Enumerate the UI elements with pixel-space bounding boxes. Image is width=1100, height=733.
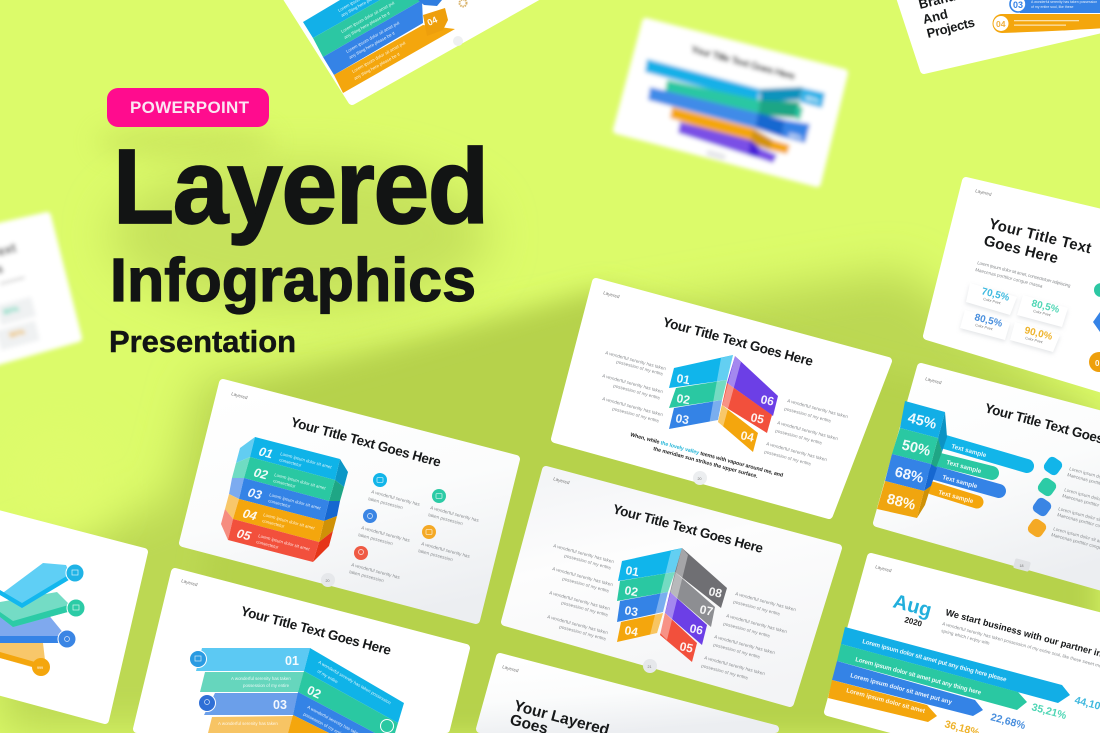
card: right stats slide: Goes Here — [982, 232, 1060, 267]
card: top right brand slide — [899, 0, 1100, 70]
title: Your Title Text Goes Here — [611, 501, 765, 556]
chart: fold 8 — [617, 548, 727, 662]
chart: fold 6: 01 — [675, 371, 691, 387]
icon list: A wonderful serenity has — [361, 525, 411, 543]
pills: Text sample — [941, 474, 978, 490]
card: bottom left layers slide — [0, 513, 144, 720]
chart: fold 6 — [669, 355, 778, 452]
card: layered steps slide: Layered — [181, 578, 199, 587]
card: 5 stacked layers slide — [183, 383, 516, 620]
card: top layered slide: any thing here please be it — [353, 51, 401, 81]
right captions: possession of my entire — [701, 663, 749, 681]
icon list: taken possession — [349, 569, 385, 583]
page number: 20 — [698, 477, 702, 481]
chart: fold 8: 08 — [707, 584, 724, 601]
chart: fold 8: 07 — [698, 602, 715, 619]
left captions: A wonderful serenity has taken — [553, 543, 615, 564]
card: right stats slide: Maecenas porttitor congue massa — [975, 267, 1044, 289]
right captions — [701, 591, 797, 681]
title: Your Title Text Goes Here — [239, 603, 393, 658]
card: right stats slide: Lorem ipsum dolor sit amet, consectetuer adipiscing — [977, 260, 1072, 288]
right captions: possession of my entire — [713, 642, 761, 660]
right captions — [764, 398, 849, 467]
card: right stats slide: 0 — [1095, 359, 1100, 368]
card: top layered slide — [285, 0, 540, 101]
stat: 90,0% — [1010, 322, 1060, 354]
band 03: 03 — [1013, 0, 1023, 10]
arrows chart — [828, 627, 1100, 733]
pills — [932, 442, 1027, 505]
card: 01 to 08 fold slide: Layered — [553, 476, 571, 485]
chart: steps: A wonderful serenity has taken possession — [318, 660, 392, 706]
card: 01 to 06 fold slide — [555, 282, 888, 515]
icon list: A wonderful serenity has — [430, 505, 480, 523]
card: right stats slide: Your Title Text — [987, 215, 1093, 257]
chart: stacked cube: Lorem ipsum dolor sit amet — [263, 512, 316, 531]
card: top right brand slide: Projects — [925, 15, 976, 41]
arrows chart: 35,21% — [1030, 701, 1068, 722]
arrows chart: 22,68% — [989, 711, 1027, 732]
right captions: possession of my entire — [784, 406, 832, 424]
chart: fold 8: 03 — [623, 603, 639, 619]
chart: stacked cube: 04 — [241, 506, 258, 524]
chart: fold 8: 04 — [623, 623, 639, 639]
icon list: A wonderful serenity has — [371, 489, 421, 507]
right captions: A wonderful serenity has taken — [766, 441, 828, 462]
band 03: of my entire soul, like these — [1031, 5, 1073, 9]
right captions: A wonderful serenity has taken — [714, 634, 776, 655]
heading: Infographics: Infographics — [110, 246, 476, 314]
stat: 70,5%: 70,5% — [980, 286, 1011, 304]
chart: stacked cube: consectetur — [256, 539, 279, 550]
chart: percentage stack — [877, 401, 947, 518]
icons — [32, 564, 85, 676]
left captions: A wonderful serenity has taken — [602, 373, 664, 394]
card: 01 to 08 fold slide — [505, 470, 838, 703]
page number — [693, 471, 707, 485]
page number: 20 — [326, 579, 330, 583]
card: top layered slide: Lorem ipsum dolor sit amet put — [340, 0, 396, 34]
icon list: A wonderful serenity has — [351, 562, 401, 580]
icon list: taken possession — [368, 496, 404, 510]
right captions: possession of my entire — [723, 621, 771, 639]
icon: gear — [460, 0, 466, 6]
stat: 80,5% green: Color Point — [1033, 309, 1051, 317]
stat: 90,0%: 90,0% — [1023, 325, 1054, 343]
card: August business slide: Layered — [875, 564, 893, 573]
card: top layered slide: any thing here please be it — [343, 10, 391, 40]
chart: stacked cube: Lorem ipsum dolor sit amet — [280, 451, 333, 470]
card: right stats slide — [927, 181, 1100, 390]
card: top layered slide: any thing here please be it — [348, 30, 396, 60]
chart: stacked cube — [221, 437, 348, 562]
card: top layered slide: Lorem ipsum dolor sit amet put — [345, 20, 401, 54]
left captions: possession of my entire — [559, 624, 607, 642]
left captions: possession of my entire — [616, 359, 664, 377]
card: your layered text slide — [480, 657, 775, 733]
right captions: possession of my entire — [764, 449, 812, 467]
card: top blurred slide — [617, 22, 844, 183]
chart: fold 8: 02 — [623, 583, 639, 599]
band 03: A wonderful serenity has taken possession — [1031, 0, 1097, 4]
right captions: possession of my entire — [733, 599, 781, 617]
left captions: A wonderful serenity has taken — [605, 350, 667, 371]
arrows chart: Lorem ipsum dolor sit amet put any — [849, 672, 953, 706]
card: top right brand slide: And — [921, 6, 949, 27]
chart: stacked cube: 05 — [235, 526, 253, 544]
left captions — [547, 543, 615, 642]
page number — [1013, 558, 1031, 572]
chart: stacked cube: consectetur — [268, 498, 291, 509]
card: left blurred slide — [0, 216, 78, 362]
chart: fold 8: 01 — [624, 563, 640, 579]
card: right stats slide: Layered — [975, 188, 993, 197]
arrows chart: Lorem ipsum dolor sit amet put any thing here please — [861, 638, 1008, 684]
card: August business slide — [828, 557, 1100, 733]
chart: percentage stack: 68% — [893, 464, 925, 487]
page number: 21 — [648, 665, 652, 669]
title: Your Title Text Goes Here — [661, 314, 815, 369]
left captions: A wonderful serenity has taken — [549, 590, 611, 611]
icons — [190, 650, 394, 732]
icon list — [349, 473, 480, 583]
icon list — [1026, 455, 1100, 551]
chart: stacked cube: consectetur — [279, 457, 302, 468]
chart: steps: A wonderful serenity has taken — [231, 676, 291, 681]
chart: stacked cube: Lorem ipsum dolor sit amet — [274, 472, 327, 491]
card: top blurred slide: 80% — [804, 95, 821, 106]
pills: Text sample — [945, 459, 982, 475]
stat: 80,5% blue: 80,5% — [973, 312, 1004, 330]
left captions: A wonderful serenity has taken — [602, 396, 664, 417]
chart: steps: 01 — [285, 654, 299, 668]
stat: 80,5% green: 80,5% — [1030, 298, 1061, 316]
chart: stacked cube: 01 — [257, 444, 274, 462]
card: percentage stack slide — [877, 367, 1100, 588]
right captions: A wonderful serenity has taken — [777, 420, 839, 441]
left captions: possession of my entire — [561, 600, 609, 618]
chart: stacked cube: Lorem ipsum dolor sit amet — [269, 492, 322, 511]
arrows chart: Lorem ipsum dolor sit amet — [845, 687, 926, 715]
badge: POWERPOINT: POWERPOINT — [130, 98, 250, 117]
stat: 80,5% blue — [960, 310, 1010, 342]
band 04: 04 — [996, 19, 1006, 29]
stat: 80,5% blue: Color Point — [975, 323, 993, 331]
right captions: A wonderful serenity has taken — [735, 591, 797, 612]
icon list: A wonderful serenity has — [421, 541, 471, 559]
pills: Text sample — [937, 489, 974, 505]
left captions: possession of my entire — [612, 406, 660, 424]
chart: stacked cube: 02 — [252, 465, 269, 483]
icon list: taken possession — [418, 548, 454, 562]
card: 5 stacked layers slide: Layered — [231, 391, 249, 400]
stat: 90,0%: Color Point — [1025, 336, 1043, 344]
page number — [321, 573, 335, 587]
chart: steps: 02 — [305, 683, 323, 702]
card: top blurred slide: Your Title Text Goes Here — [689, 43, 797, 83]
card: 01 to 06 fold slide: Layered — [603, 290, 621, 299]
left captions — [602, 350, 667, 424]
date: 2020 — [903, 615, 924, 629]
icons: 999 — [37, 666, 43, 670]
card: left blurred slide: 80% — [2, 304, 20, 317]
right captions: possession of my entire — [775, 428, 823, 446]
left captions: possession of my entire — [562, 576, 610, 594]
stat: 80,5% green — [1017, 295, 1068, 329]
caption: bold statement: When, while the lovely valley teems with vapour around me, and — [629, 432, 784, 479]
pills: Text sample — [950, 443, 987, 459]
band 03 — [1010, 0, 1100, 13]
chart: steps — [196, 648, 404, 733]
icon list: taken possession — [428, 512, 464, 526]
right captions: A wonderful serenity has taken — [726, 613, 788, 634]
heading: Layered: Layered — [113, 127, 489, 246]
icon list: taken possession — [358, 532, 394, 546]
card: August business slide: spring which I enjoy with — [941, 628, 991, 646]
chart: stacked cube: Lorem ipsum dolor sit amet — [258, 533, 311, 552]
chart: stacked sheets — [0, 563, 75, 668]
left captions: possession of my entire — [613, 383, 661, 401]
badge: POWERPOINT — [107, 88, 269, 127]
tag 04: 04 — [426, 15, 439, 28]
arrows chart: Lorem ipsum dolor sit amet put any thing here — [854, 656, 982, 697]
card: your layered text slide: Layered — [502, 664, 520, 673]
left captions: possession of my entire — [564, 553, 612, 571]
chart: percentage stack: 45% — [906, 410, 938, 433]
page number — [643, 659, 657, 673]
chart: steps: 03 — [273, 698, 287, 712]
caption: bold statement: the meridian sun strikes the upper surface. — [652, 446, 759, 480]
date: Aug — [891, 591, 934, 622]
chart: stacked cube: consectetur — [262, 518, 285, 529]
chart: stacked cube: consectetur — [273, 478, 296, 489]
stat: 70,5%: Color Point — [983, 297, 1001, 305]
chart: fold 8: 06 — [688, 621, 705, 638]
page number: 18 — [1020, 564, 1024, 568]
right captions: A wonderful serenity has taken — [787, 398, 849, 419]
chart: steps: possession of my entire — [243, 683, 290, 688]
tag 04 — [423, 8, 448, 36]
heading: Presentation: Presentation — [109, 324, 296, 359]
chart: steps: of my entire — [316, 669, 339, 685]
chart: fold 6: 05 — [749, 410, 766, 427]
left captions: A wonderful serenity has taken — [547, 614, 609, 635]
chart: stacked cube: 03 — [246, 485, 263, 503]
right captions: A wonderful serenity has taken — [704, 655, 766, 676]
card: top layered slide: Lorem ipsum dolor sit amet put — [351, 40, 407, 74]
stat: 70,5% — [965, 283, 1017, 317]
chart: percentage stack: 50% — [900, 437, 932, 460]
card: left blurred slide: 90% — [8, 327, 26, 340]
title: Your Title Text Goes Here — [289, 414, 443, 470]
chart: steps: A wonderful serenity has taken — [218, 721, 278, 726]
card: percentage stack slide: Layered — [925, 376, 943, 385]
chart: fold 6: 02 — [675, 391, 691, 407]
card: layered steps slide — [137, 572, 466, 733]
chart: fold 6: 04 — [739, 428, 756, 445]
chart: percentage stack: 88% — [885, 491, 917, 514]
chart: fold 6: 06 — [759, 392, 776, 409]
left captions: A wonderful serenity has taken — [552, 566, 614, 587]
chart: fold 6: 03 — [674, 411, 690, 427]
band 04 — [992, 14, 1100, 33]
card: top blurred slide: 68% — [787, 132, 804, 143]
chart: fold 8: 05 — [678, 639, 695, 656]
